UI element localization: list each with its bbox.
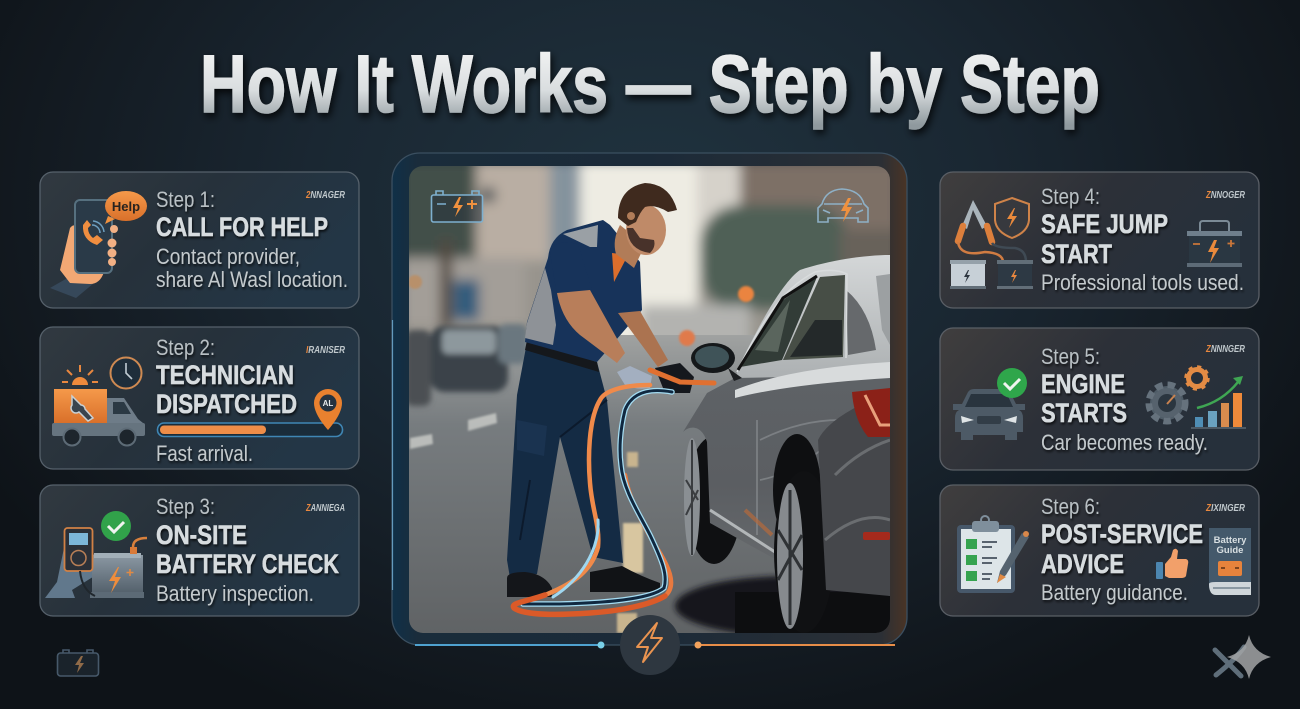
icon: multimeter and battery	[45, 511, 147, 598]
logo mark: ZNNNGER	[1205, 343, 1245, 355]
step 2 text: Fast arrival.	[156, 441, 253, 466]
icon: car with check badge	[953, 368, 1027, 440]
icon: hand holding phone	[50, 191, 147, 298]
icon: car overlay	[818, 189, 868, 222]
photo: technician jump-starting a car	[400, 160, 905, 637]
step 4 text: START	[1041, 239, 1112, 269]
technician	[507, 183, 694, 597]
step 5 text: ENGINE	[1041, 369, 1125, 399]
panel: step 3	[40, 485, 359, 616]
logo mark: ZNNOGER	[1205, 189, 1245, 201]
bokeh lights	[408, 275, 754, 346]
step 3 text: ON-SITE	[156, 520, 247, 550]
panel: step 2	[40, 327, 359, 469]
road	[409, 335, 890, 633]
step 1 text: Step 1:	[156, 187, 215, 212]
step 4 text	[1041, 184, 1244, 295]
step 6 text: POST-SERVICE	[1041, 519, 1203, 549]
icon: bolt badge	[620, 615, 680, 675]
step 5 text	[1041, 344, 1208, 455]
step 6 text: Step 6:	[1041, 494, 1100, 519]
step 3 text: BATTERY CHECK	[156, 549, 339, 579]
step 4 text: Professional tools used.	[1041, 270, 1244, 295]
icon: gears and growth chart	[1150, 367, 1246, 428]
icon: hand holding phone: Help	[112, 199, 140, 214]
icon: battery guide book: Battery	[1214, 535, 1247, 546]
icon: battery overlay	[432, 191, 482, 222]
icon: checklist clipboard and pen	[957, 516, 1029, 593]
logo mark: ZIXINGER	[1205, 502, 1245, 514]
step 6 text: ADVICE	[1041, 549, 1124, 579]
panel: step 6	[940, 485, 1259, 616]
progress bar	[158, 423, 342, 436]
icon: location pin: AL	[323, 399, 333, 408]
step 2 text: Step 2:	[156, 335, 215, 360]
parked cars	[405, 324, 528, 406]
step 3 text: Step 3:	[156, 494, 215, 519]
icon: footer battery	[58, 650, 98, 676]
step 4 text: SAFE JUMP	[1041, 209, 1168, 239]
icon: jumper clamps and batteries	[950, 198, 1033, 289]
icon: car battery	[1187, 221, 1242, 267]
icon: tools and sparkle	[1215, 635, 1271, 679]
orange connector line	[694, 642, 895, 648]
step 6 text: Battery guidance.	[1041, 580, 1188, 605]
car	[675, 255, 905, 637]
logo mark: 2NNAGER	[305, 189, 345, 201]
blue connector line	[415, 642, 604, 648]
icon: battery guide book	[1209, 528, 1251, 595]
panel: step 1	[40, 172, 359, 308]
icon: service truck	[52, 358, 145, 446]
panel: step 5	[940, 328, 1259, 470]
step 1 text: share Al Wasl location.	[156, 267, 348, 292]
step 6 text	[1041, 494, 1203, 605]
step 5 text: STARTS	[1041, 398, 1127, 428]
icon: thumbs up	[1156, 549, 1188, 579]
step 3 text: Battery inspection.	[156, 581, 314, 606]
logo mark: ZANNIEGA	[305, 502, 345, 514]
jumper cables and clamp	[513, 370, 714, 614]
panel: center photo frame	[392, 153, 907, 675]
step 5 text: Car becomes ready.	[1041, 430, 1208, 455]
panel: step 4	[940, 172, 1259, 308]
icon: battery guide book: Guide	[1217, 545, 1243, 556]
step 1 text: Contact provider,	[156, 244, 300, 269]
step 2 text	[156, 335, 297, 466]
road markings	[410, 413, 643, 633]
step 1 text	[156, 187, 348, 292]
icon: location pin	[314, 389, 342, 430]
step 4 text: Step 4:	[1041, 184, 1100, 209]
step 2 text: DISPATCHED	[156, 389, 297, 419]
logo mark: IRANISER	[306, 344, 345, 356]
blurred street backdrop	[409, 166, 890, 335]
step 1 text: CALL FOR HELP	[156, 212, 328, 242]
step 3 text	[156, 494, 339, 606]
step 5 text: Step 5:	[1041, 344, 1100, 369]
step 2 text: TECHNICIAN	[156, 360, 294, 390]
